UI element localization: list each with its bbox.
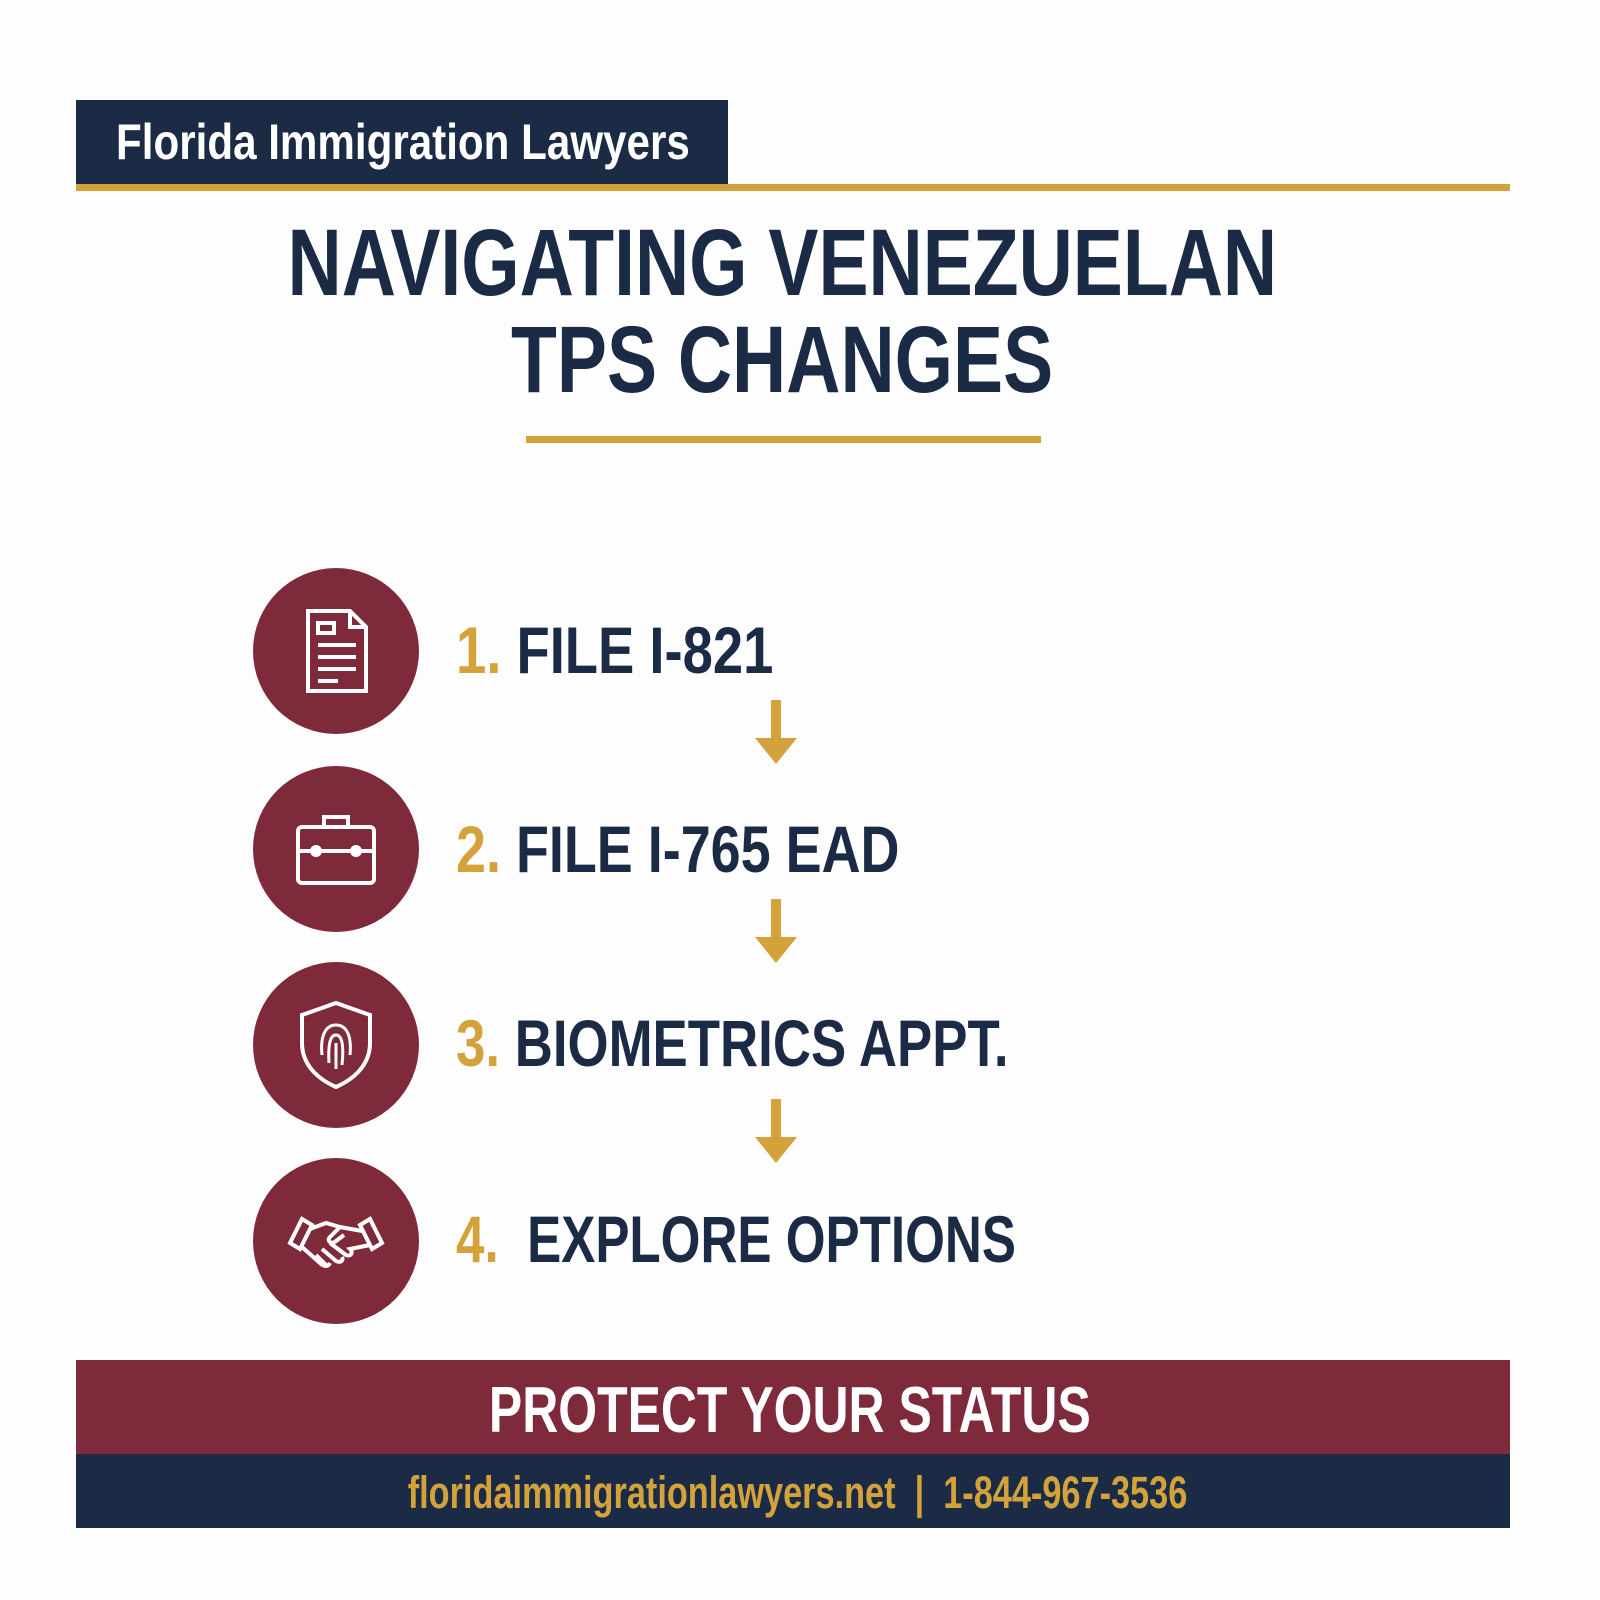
icon: document <box>253 568 419 734</box>
step 1: 1. FILE I-821 <box>456 613 773 687</box>
header badge <box>76 100 728 185</box>
footer contact bar <box>76 1454 1510 1528</box>
icon: fingerprint shield <box>253 962 419 1128</box>
contact text: floridaimmigrationlawyers.net | 1-844-967-3536 <box>408 1467 1188 1518</box>
arrow 2 <box>755 899 797 963</box>
gold rule <box>76 184 1510 191</box>
icon: briefcase <box>253 766 419 932</box>
title underline <box>526 436 1041 443</box>
arrow 3 <box>755 1099 797 1163</box>
title: TPS CHANGES <box>511 307 1053 413</box>
footer banner red <box>76 1360 1510 1454</box>
arrow 1 <box>755 700 797 764</box>
step 4: 4. EXPLORE OPTIONS <box>456 1202 1016 1276</box>
title <box>287 210 1277 413</box>
footer headline: PROTECT YOUR STATUS <box>489 1373 1091 1446</box>
step 2: 2. FILE I-765 EAD <box>456 812 899 886</box>
header badge: Florida Immigration Lawyers <box>116 114 690 170</box>
title: NAVIGATING VENEZUELAN <box>287 210 1277 316</box>
icon: handshake <box>253 1158 419 1324</box>
step 3: 3. BIOMETRICS APPT. <box>456 1006 1009 1080</box>
